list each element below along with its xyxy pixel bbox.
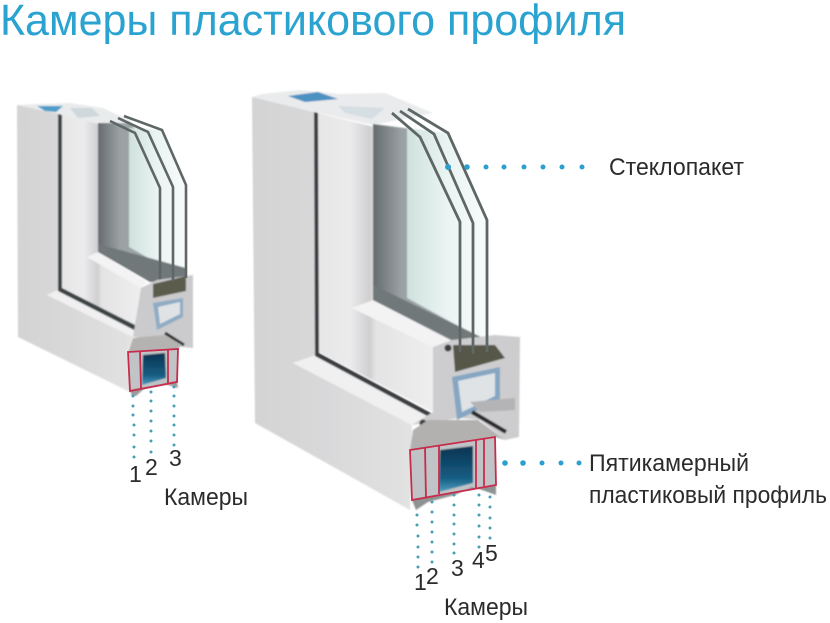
large window dotted leaders [416,494,492,568]
small window chamber numbers: 3 [169,445,182,471]
large window chamber numbers: 3 [451,555,464,581]
large window glass panes [392,109,487,354]
small window profile section [128,349,178,396]
small window red chamber outlines [128,349,178,391]
callout: double-glazed unit [445,154,744,181]
large window chamber numbers: 2 [426,563,439,589]
large window label: Камеры [444,594,528,621]
large window red chamber outlines [410,437,496,500]
small window label: Камеры [164,484,248,511]
large window chamber numbers: 1 [414,569,427,595]
large window: five-chamber profile [252,90,528,621]
dotted leader to glazing [445,164,584,170]
large window chamber numbers: 4 [472,547,485,573]
small window glass panes [110,116,186,281]
small window chamber numbers: 1 [129,461,142,487]
small window: three-chamber profile [17,103,248,511]
profile label line 1: Пятикамерный [589,450,749,477]
large window profile section [410,437,496,510]
small window dotted leaders [132,386,176,458]
large window chamber numbers: 5 [485,540,498,566]
small window body [17,103,193,392]
large window chamber numbers [414,540,498,595]
small window chamber numbers: 2 [145,454,158,480]
glazing label: Стеклопакет [609,154,744,181]
callout: five-chamber profile [502,450,827,509]
small window chamber numbers [129,445,182,487]
dotted leader to profile [502,460,582,466]
large window body [252,90,520,510]
